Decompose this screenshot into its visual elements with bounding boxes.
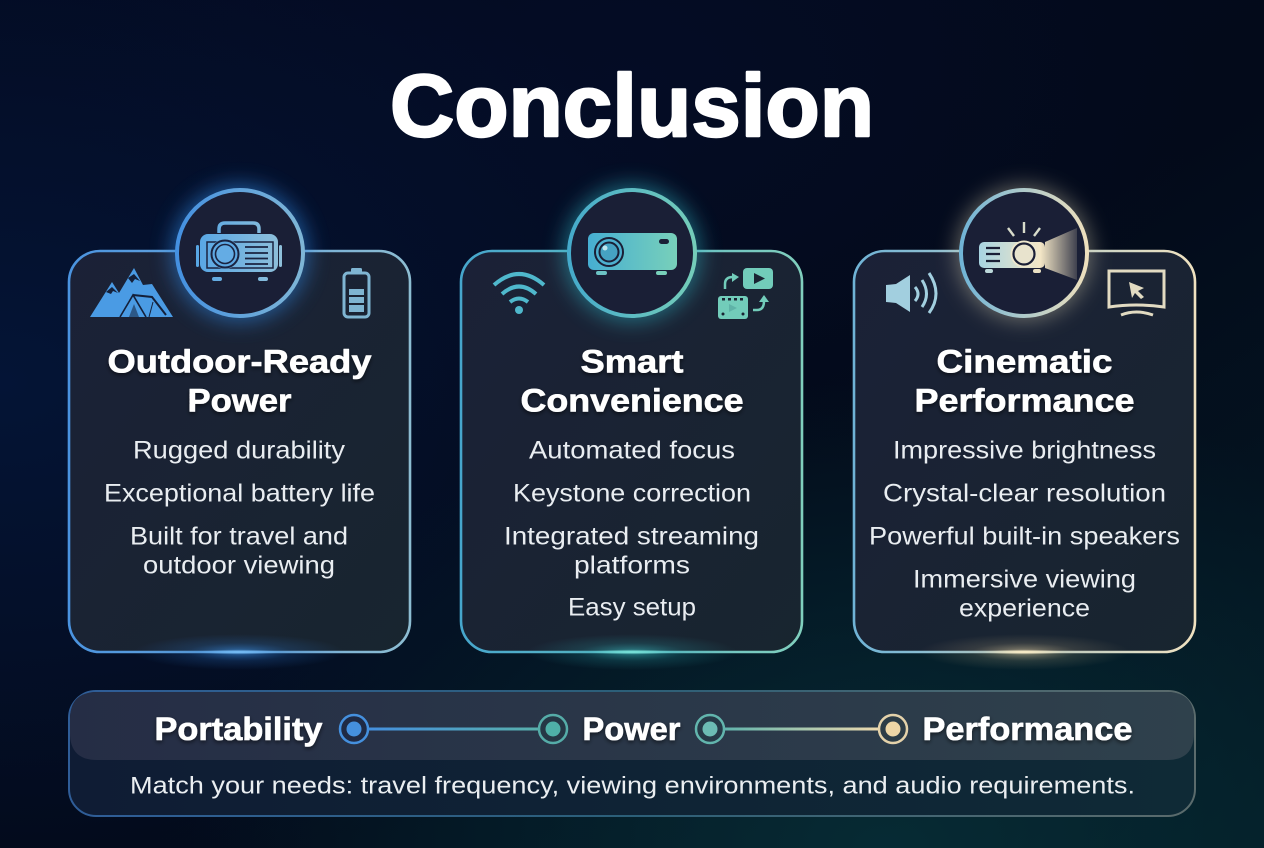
node: portability: [340, 715, 368, 743]
bullet list: platforms: [574, 552, 690, 580]
icon: screen with cursor: [1109, 271, 1164, 315]
icon badge: projector with beam: [961, 190, 1087, 316]
icon badge: compact projector: [569, 190, 695, 316]
panel: summary bar: [69, 691, 1195, 816]
icon badge: rugged projector: [177, 190, 303, 316]
bullet list: Keystone correction: [513, 480, 751, 508]
bullet list: Impressive brightness: [893, 436, 1156, 464]
icon: wifi: [494, 274, 544, 314]
connector line: power to performance: [725, 728, 878, 730]
bullet list: Integrated streaming: [504, 522, 759, 550]
bottom glow: [527, 634, 737, 670]
card frame: [461, 251, 802, 652]
heading: [108, 344, 372, 418]
bullet list: [869, 436, 1180, 622]
bar frame: [69, 691, 1195, 816]
label: performance: Performance: [922, 711, 1132, 747]
icon: battery: [344, 268, 369, 317]
heading: Smart: [580, 344, 684, 380]
circle glow: [172, 185, 308, 321]
bottom glow: [134, 634, 344, 670]
heading: [914, 344, 1134, 418]
bullet list: Immersive viewing: [913, 566, 1136, 594]
bullet list: Crystal-clear resolution: [883, 480, 1166, 508]
bullet list: Automated focus: [529, 436, 735, 464]
node: power right: [696, 715, 724, 743]
bullet list: Easy setup: [568, 594, 696, 622]
card frame: [69, 251, 410, 652]
bullet list: outdoor viewing: [143, 552, 335, 580]
bullet list: [504, 436, 759, 622]
connector line: portability to power: [369, 728, 538, 730]
summary sentence: Match your needs: travel frequency, viewing environments, and audio requirements.: [130, 772, 1135, 800]
card frame: [854, 251, 1195, 652]
panel: cinematic performance: [854, 186, 1195, 670]
bullet list: Powerful built-in speakers: [869, 522, 1180, 550]
heading: Outdoor-Ready: [108, 344, 372, 380]
bottom glow: [919, 634, 1129, 670]
icon: speaker: [886, 273, 936, 313]
bullet list: experience: [959, 594, 1090, 622]
bullet list: [104, 436, 375, 580]
circle glow: [957, 186, 1091, 320]
title: Conclusion: [390, 56, 874, 155]
circle glow: [564, 185, 700, 321]
bar top band: [70, 692, 1194, 760]
panel: smart convenience: [461, 185, 802, 670]
node: power left: [539, 715, 567, 743]
icon: mountains and tent: [90, 268, 173, 317]
label: portability: Portability: [154, 711, 323, 747]
heading: [520, 344, 744, 418]
heading: Convenience: [520, 382, 744, 418]
node: performance: [879, 715, 907, 743]
bullet list: Built for travel and: [130, 522, 348, 550]
bullet list: Exceptional battery life: [104, 480, 375, 508]
icon: streaming media: [718, 268, 773, 319]
bullet list: Rugged durability: [133, 436, 346, 464]
heading: Performance: [914, 382, 1134, 418]
heading: Cinematic: [936, 344, 1112, 380]
label: power: Power: [582, 711, 680, 747]
heading: Power: [188, 382, 292, 418]
panel: outdoor-ready power: [69, 185, 410, 670]
